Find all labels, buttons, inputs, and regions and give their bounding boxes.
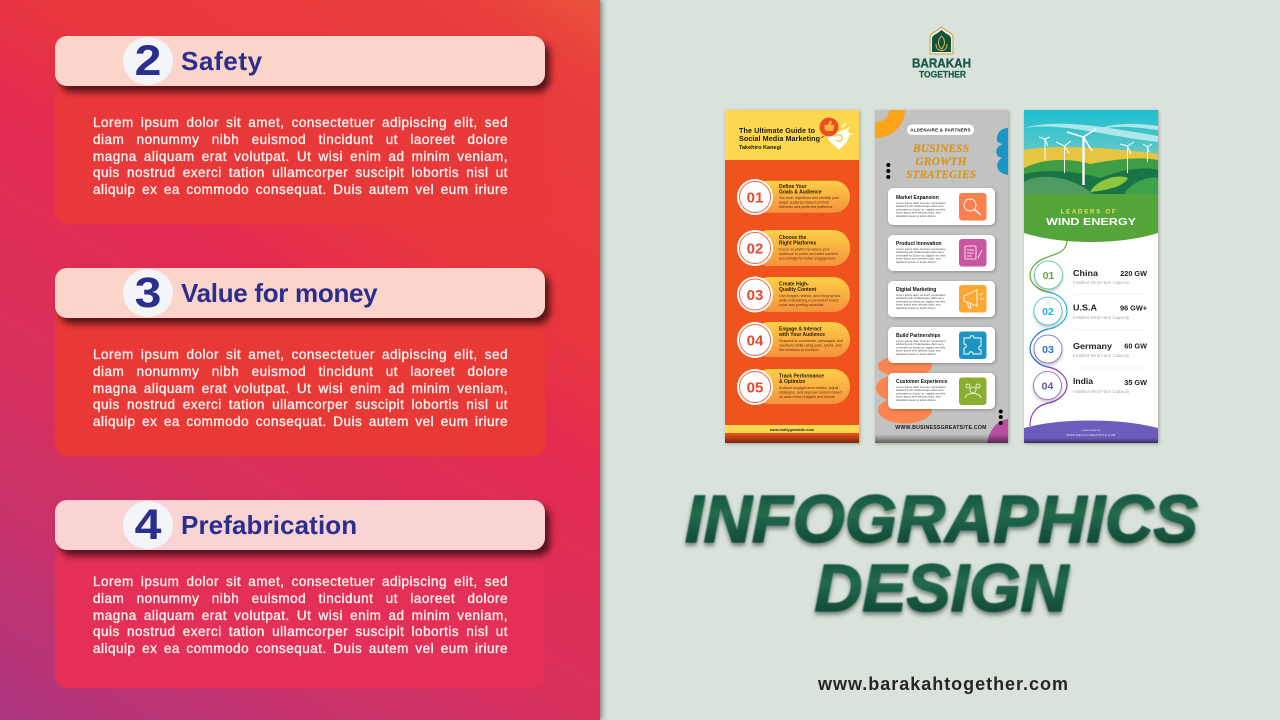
panel: wind energy infographic: [1024, 110, 1158, 443]
card: Digital Marketing: venenatis eu dictum at, sagittis nec felis: [896, 299, 946, 303]
step 05: 05: [747, 380, 763, 396]
text block: Prefabrication description: aliquip ex ea commodo consequat. Duis autem vel eum iriure: [93, 641, 508, 656]
step 05: & Optimize: [779, 379, 805, 385]
header bar: Safety: [55, 36, 545, 86]
text block: Value for money description: aliquip ex ea commodo consequat. Duis autem vel eum iriure: [93, 414, 508, 429]
card: Value for money: [55, 268, 545, 456]
logo wordmark BARAKAH: BARAKAH: [912, 56, 971, 70]
step 05: strategies, and improve content based: [779, 390, 842, 394]
footer band: [725, 425, 859, 443]
step 02: Choose the: [779, 235, 806, 241]
footer band: Learn more at: [1082, 428, 1100, 432]
badge: Aldenaire & Partners: ALDENAIRE & PARTNERS: [910, 128, 971, 132]
card: Market Expansion: dignissim ipsum ut turpis dictum.: [896, 214, 937, 218]
text block: Prefabrication description: [93, 574, 508, 656]
card: Product Innovation: Product Innovation: [896, 241, 942, 247]
panel: social media marketing infographic: [725, 110, 859, 443]
card: Digital Marketing: dignissim ipsum ut turpis dictum.: [896, 306, 937, 310]
card: Build Partnerships: lorem ipsum sem ultricies dolor, sed: [896, 349, 941, 353]
header band: [725, 110, 859, 160]
row: U.S.A: U.S.A: [1073, 302, 1097, 312]
step 03: Quality Content: [779, 287, 817, 293]
row: China: Installed Wind Farm Capacity: [1073, 280, 1130, 285]
footer band: [1024, 420, 1158, 443]
text block: Value for money description: magna aliquam erat volutpat. Ut wisi enim ad minim veniam,: [93, 381, 508, 396]
number badge 3: [123, 269, 173, 317]
heading: Business Growth Strategies: GROWTH: [916, 156, 968, 168]
step 04: Engage & Interact: [779, 326, 822, 332]
title: Infographics Design: [685, 482, 1198, 626]
text block: Value for money description: [93, 347, 508, 430]
number badge 3: 3: [135, 269, 161, 317]
row: U.S.A: 96 GW+: [1120, 304, 1147, 312]
number badge 2: [123, 37, 173, 85]
text block: Safety description: aliquip ex ea commodo consequat. Duis autem vel eum iriure: [93, 182, 508, 197]
card: Build Partnerships: dignissim ipsum ut turpis dictum.: [896, 352, 937, 356]
card: Product Innovation: lorem ipsum sem ultricies dolor, sed: [896, 257, 941, 261]
card: Build Partnerships: [888, 327, 995, 363]
row: India: 04: [1042, 380, 1053, 392]
step 02: Focus on platforms where your: [779, 248, 830, 252]
step 04: mentions while using polls, Q&As, and: [779, 344, 842, 348]
website url: www.barakahtogether.com: [817, 674, 1068, 694]
text block: Value for money description: Lorem ipsum dolor sit amet, consectetuer adipiscing elit, sed: [93, 347, 508, 362]
card: Market Expansion: Market Expansion: [896, 195, 939, 201]
heading: Ultimate Guide: Takehiro Kanegi: [739, 145, 782, 151]
card: Customer Experience: venenatis eu dictum at, sagittis nec felis: [896, 391, 946, 395]
card: Digital Marketing: [888, 281, 995, 317]
step 01: interests and preferred platforms.: [779, 205, 833, 209]
card: Customer Experience: Customer Experience: [896, 379, 948, 385]
header bar: Prefabrication: [55, 500, 545, 550]
step 04: live sessions to connect.: [779, 348, 819, 352]
step 03: [737, 276, 850, 312]
step 03: Use images, videos, and infographics: [779, 294, 840, 298]
step 01: 01: [747, 190, 763, 206]
illustration: sky and hills: [1024, 110, 1158, 197]
decor: orange arc: [875, 110, 905, 138]
dots top: [886, 163, 890, 179]
text block: Safety description: magna aliquam erat volutpat. Ut wisi enim ad minim veniam,: [93, 149, 508, 164]
panel: business growth strategies infographic: [875, 110, 1008, 443]
row: India: India: [1073, 376, 1093, 386]
header bar: Value for money: [55, 268, 545, 318]
step 04: Respond to comments, messages, and: [779, 339, 843, 343]
title: Infographics Design: INFOGRAPHICS: [685, 482, 1198, 557]
card: Product Innovation: dignissim ipsum ut turpis dictum.: [896, 260, 937, 264]
card: Build Partnerships: adipiscing elit. Pellentesque diam sem,: [896, 342, 944, 346]
step 05: Track Performance: [779, 374, 824, 380]
card: Customer Experience: lorem ipsum sem ultricies dolor, sed: [896, 395, 941, 399]
card: Digital Marketing: Lorem ipsum dolor sit amet, consectetur: [896, 293, 946, 297]
decor: orange blobs: [876, 355, 932, 424]
heading: Prefabrication: Prefabrication: [181, 510, 357, 540]
card: Product Innovation: Lorem ipsum dolor sit amet, consectetur: [896, 247, 946, 251]
row: China: 220 GW: [1120, 269, 1147, 278]
title: Infographics Design: DESIGN: [814, 551, 1070, 626]
card: Market Expansion: Lorem ipsum dolor sit amet, consectetur: [896, 201, 946, 205]
number badge 4: 4: [135, 501, 161, 549]
row: India: [1034, 368, 1147, 400]
card: Market Expansion: lorem ipsum sem ultricies dolor, sed: [896, 211, 941, 215]
text block: Value for money description: diam nonummy nibh euismod tincidunt ut laoreet dolore: [93, 364, 508, 379]
card: Build Partnerships: Build Partnerships: [896, 333, 941, 339]
card: Market Expansion: venenatis eu dictum at, sagittis nec felis: [896, 207, 946, 211]
heading: Safety: Safety: [181, 46, 263, 76]
row: Germany: Germany: [1073, 341, 1112, 351]
text block: Prefabrication description: Lorem ipsum dolor sit amet, consectetuer adipiscing elit, sed: [93, 574, 508, 589]
decor: teal scallops: [996, 128, 1008, 175]
footer band: WWW.REALLYGREATSITE.COM: [1067, 433, 1116, 437]
step 03: Create High-: [779, 282, 809, 288]
row: India: Installed Wind Farm Capacity: [1073, 389, 1130, 394]
text block: Prefabrication description: diam nonummy nibh euismod tincidunt ut laoreet dolore: [93, 591, 508, 606]
row: U.S.A: Installed Wind Farm Capacity: [1073, 315, 1130, 320]
card: Market Expansion: adipiscing elit. Pellentesque diam sem,: [896, 204, 944, 208]
step 02: accordingly for better engagement.: [779, 256, 836, 260]
card: Product Innovation: adipiscing elit. Pellentesque diam sem,: [896, 250, 944, 254]
step 04: [737, 322, 850, 358]
step 01: [737, 179, 850, 215]
heading: Value for money: Value for money: [181, 278, 377, 308]
heading: Ultimate Guide: Social Media Marketing: [739, 134, 820, 143]
row: Germany: Installed Wind Farm Capacity: [1073, 353, 1130, 358]
heading: Business Growth Strategies: [906, 143, 976, 181]
card: Market Expansion: [888, 188, 995, 225]
card: Customer Experience: [888, 373, 995, 409]
text block: Prefabrication description: magna aliquam erat volutpat. Ut wisi enim ad minim veniam,: [93, 608, 508, 623]
card: Product Innovation: venenatis eu dictum at, sagittis nec felis: [896, 253, 946, 257]
step 04: with Your Audience: [778, 332, 825, 338]
heading: Leaders of Wind Energy: LEADERS OF: [1061, 210, 1117, 216]
step 01: Define Your: [779, 184, 807, 190]
card: Customer Experience: Lorem ipsum dolor sit amet, consectetur: [896, 385, 946, 389]
card: Digital Marketing: adipiscing elit. Pellentesque diam sem,: [896, 296, 944, 300]
text block: Safety description: diam nonummy nibh euismod tincidunt ut laoreet dolore: [93, 132, 508, 147]
number badge 4: [123, 501, 173, 549]
icon: wind turbines: [1039, 129, 1152, 185]
row: Germany: 60 GW: [1124, 342, 1147, 350]
row: Germany: 03: [1042, 344, 1054, 356]
step 02: 02: [747, 240, 763, 258]
number badge 2: 2: [135, 37, 161, 85]
step 03: while maintaining a consistent brand: [779, 298, 838, 302]
card: Safety: [55, 36, 545, 224]
logo: Barakah Together: [912, 27, 971, 80]
step 04: 04: [747, 332, 764, 350]
step 05: [737, 369, 850, 405]
heading: Leaders of Wind Energy: [1046, 210, 1136, 228]
heading: Business Growth Strategies: BUSINESS: [912, 143, 969, 155]
footer band: www.reallygreatsite.com: [769, 428, 815, 432]
row: China: [1034, 261, 1147, 289]
card: Build Partnerships: venenatis eu dictum at, sagittis nec felis: [896, 345, 946, 349]
text block: Safety description: quis nostrud exerci tation ullamcorper suscipit lobortis nisl ut: [93, 165, 508, 180]
text block: Safety description: Lorem ipsum dolor sit amet, consectetuer adipiscing elit, sed: [93, 115, 508, 130]
badge: Aldenaire & Partners: [907, 124, 974, 135]
step 02: audience is active and tailor content: [779, 252, 838, 256]
connector line: [1030, 241, 1067, 426]
card: Digital Marketing: Digital Marketing: [896, 287, 936, 293]
row: China: China: [1073, 268, 1098, 278]
step 05: Analyze engagement metrics, adjust: [779, 386, 838, 390]
heading: Ultimate Guide: The Ultimate Guide to: [739, 126, 816, 135]
decor: purple corner: [987, 419, 1008, 443]
step 01: Goals & Audience: [779, 190, 822, 196]
card: Customer Experience: dignissim ipsum ut turpis dictum.: [896, 398, 937, 402]
text block: Prefabrication description: quis nostrud exerci tation ullamcorper suscipit lobortis nisl ut: [93, 624, 508, 639]
row: U.S.A: 02: [1042, 306, 1054, 318]
text block: Safety description: [93, 115, 508, 198]
step 02: [737, 230, 850, 266]
step 03: 03: [747, 287, 763, 304]
row: India: 35 GW: [1124, 378, 1147, 387]
row: Germany: [1034, 330, 1147, 363]
card: Build Partnerships: Lorem ipsum dolor sit amet, consectetur: [896, 339, 946, 343]
row: China: 01: [1043, 270, 1054, 282]
footer url: WWW.BUSINESSGREATSITE.COM: [895, 425, 987, 431]
icon: thumbs up bubble and heart: [820, 118, 852, 150]
step 01: target audience based on their: [779, 200, 830, 204]
row: U.S.A: [1034, 294, 1147, 325]
icon: arch emblem: [930, 27, 953, 54]
card: Product Innovation: [888, 235, 995, 271]
logo wordmark TOGETHER: TOGETHER: [919, 70, 966, 80]
dots bottom: [999, 410, 1003, 425]
green title band: [1024, 194, 1158, 242]
panel: left gradient background: [0, 0, 600, 720]
step 05: on data-driven insights and trends.: [779, 395, 836, 399]
step 01: Set clear objectives and identify your: [779, 196, 840, 200]
heading: Business Growth Strategies: STRATEGIES: [906, 169, 976, 181]
card: Customer Experience: adipiscing elit. Pellentesque diam sem,: [896, 388, 944, 392]
heading: Leaders of Wind Energy: WIND ENERGY: [1046, 217, 1136, 228]
card: Prefabrication: [55, 500, 545, 688]
step 02: Right Platforms: [779, 240, 816, 246]
step 03: voice and posting schedule.: [779, 303, 825, 307]
heading: Ultimate Guide: [739, 126, 820, 151]
card: Digital Marketing: lorem ipsum sem ultricies dolor, sed: [896, 303, 941, 307]
text block: Value for money description: quis nostrud exerci tation ullamcorper suscipit lobortis nisl ut: [93, 397, 508, 412]
